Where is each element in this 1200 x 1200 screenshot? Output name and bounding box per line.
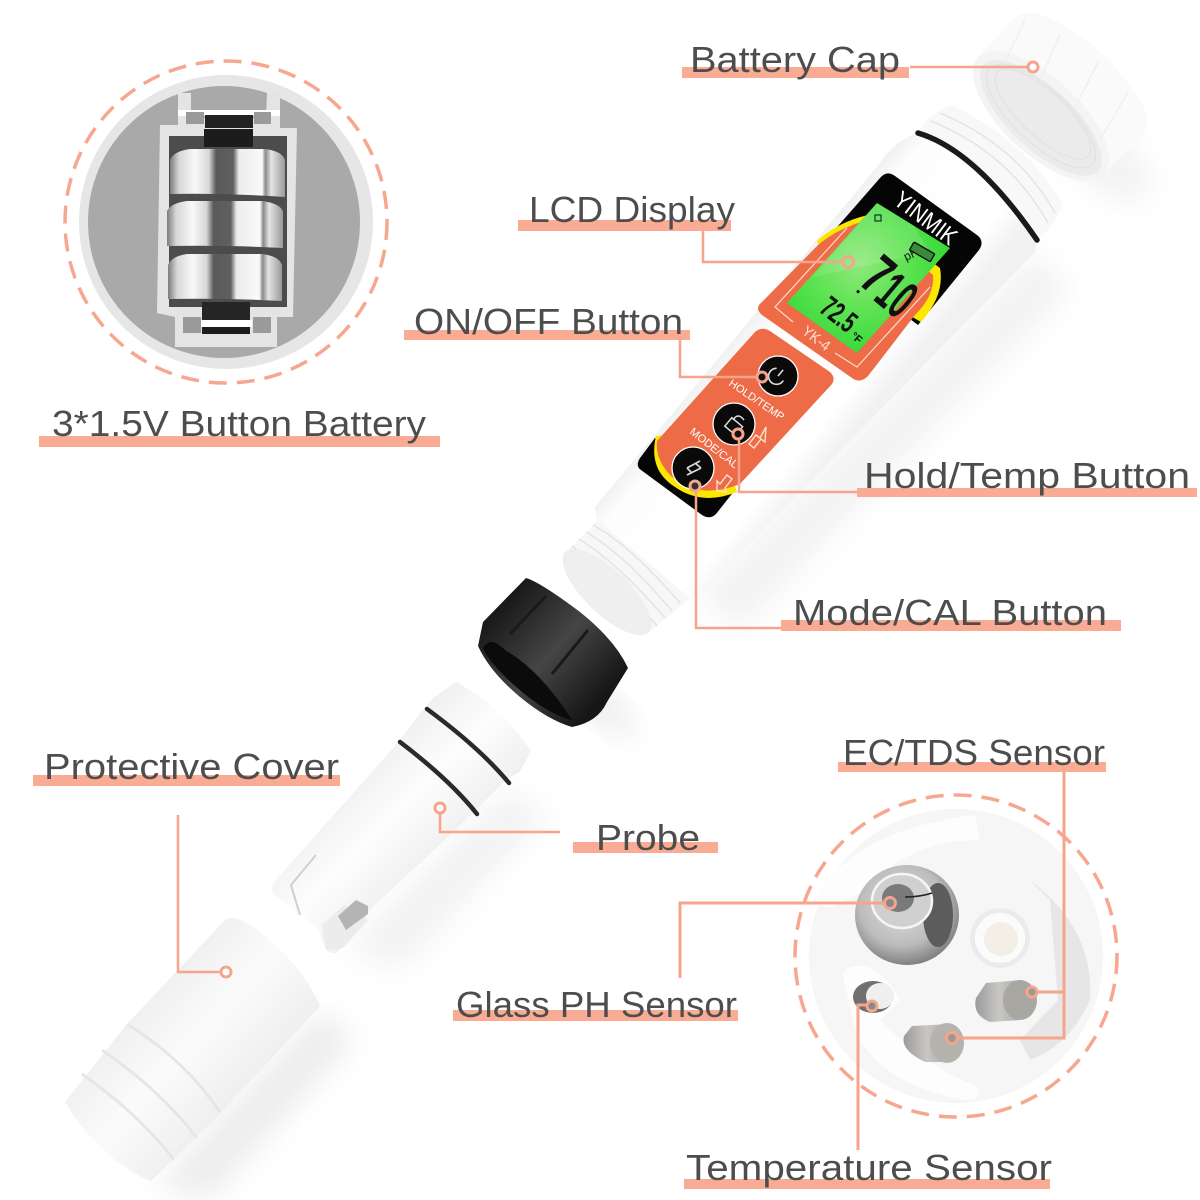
black bezel bbox=[817, 173, 982, 325]
green LCD screen bbox=[787, 203, 950, 353]
label: EC/TDS Sensor: EC/TDS Sensor bbox=[843, 732, 1105, 773]
labels: MODE/CAL: MODE/CAL bbox=[687, 426, 740, 471]
label: 3*1.5V Button Battery: 3*1.5V Button Battery bbox=[52, 403, 426, 444]
black base bbox=[638, 438, 735, 517]
label: Probe: Probe bbox=[596, 817, 700, 858]
three button batteries bbox=[167, 149, 285, 301]
leader: Probe bbox=[435, 803, 560, 832]
EC/TDS pin 2 bbox=[903, 1023, 964, 1063]
body shell bbox=[595, 133, 1037, 597]
meter main body bbox=[550, 105, 1070, 648]
reading: pH value: . bbox=[852, 278, 870, 298]
label: Mode/CAL Button: Mode/CAL Button bbox=[793, 592, 1107, 633]
leader: LCD Display bbox=[703, 231, 854, 268]
leader: Mode/CAL Button bbox=[690, 481, 781, 628]
yellow arc bbox=[817, 215, 941, 322]
label: Hold/Temp Button: Hold/Temp Button bbox=[864, 455, 1190, 496]
O-ring 2 bbox=[400, 742, 477, 814]
O-ring 1 bbox=[427, 709, 509, 783]
status icon bbox=[875, 215, 881, 221]
button: power bbox=[758, 356, 798, 396]
sensor face bbox=[809, 809, 1103, 1103]
leader: Battery Cap bbox=[910, 62, 1038, 72]
leader: Hold/Temp Button bbox=[733, 429, 857, 492]
arrow down bbox=[717, 475, 732, 492]
reading: pH value: 10 bbox=[864, 261, 929, 329]
LCD display panel bbox=[758, 173, 982, 381]
protective cover bbox=[65, 918, 355, 1200]
label: Temperature Sensor: Temperature Sensor bbox=[686, 1147, 1052, 1188]
label: Glass PH Sensor: Glass PH Sensor bbox=[456, 984, 737, 1025]
brand: YINMIK: YINMIK bbox=[888, 186, 962, 251]
cover ridges bbox=[82, 1024, 220, 1160]
unit: degrees F: °F bbox=[848, 330, 865, 347]
dashed circle: battery inset bbox=[65, 61, 387, 383]
reading: temperature: 72.5 bbox=[814, 291, 863, 339]
leader: Glass PH Sensor bbox=[680, 898, 896, 978]
leader: Temperature Sensor bbox=[858, 1001, 877, 1150]
black retaining ring bbox=[478, 578, 645, 748]
unit: pH: pH bbox=[901, 245, 921, 264]
glass pH sensor bbox=[855, 865, 959, 965]
temperature sensor bbox=[853, 981, 894, 1013]
EC/TDS pin 1 bbox=[975, 980, 1037, 1022]
button panel bbox=[638, 329, 834, 517]
reference pad bbox=[970, 908, 1030, 968]
inset: sensors bbox=[795, 795, 1117, 1117]
white ridge top bbox=[813, 815, 980, 908]
leader: EC/TDS Sensor bbox=[946, 772, 1064, 1044]
battery holder bbox=[157, 93, 297, 347]
battery housing bbox=[79, 75, 373, 369]
reading: pH value: 7 bbox=[849, 243, 907, 307]
shaded area bbox=[1020, 880, 1090, 1060]
leader: Protective Cover bbox=[178, 815, 231, 977]
button: lock bbox=[713, 403, 755, 445]
white ridge bottom bbox=[843, 966, 978, 1100]
probe contact bbox=[338, 900, 368, 930]
battery cap bbox=[952, 13, 1167, 220]
leader: ON/OFF Button bbox=[680, 340, 767, 382]
label: ON/OFF Button: ON/OFF Button bbox=[414, 301, 683, 342]
label: LCD Display: LCD Display bbox=[529, 189, 735, 230]
threaded top collar bbox=[918, 105, 1062, 240]
inset: button battery compartment bbox=[65, 61, 387, 383]
battery indicator bbox=[910, 242, 935, 262]
button: mode bbox=[672, 447, 714, 489]
threaded bottom collar bbox=[565, 520, 690, 632]
label: Probe bbox=[573, 817, 718, 858]
yellow arc bbox=[654, 435, 737, 498]
dashed circle: sensor inset bbox=[795, 795, 1117, 1117]
battery contacts bbox=[178, 110, 280, 334]
label: Protective Cover: Protective Cover bbox=[44, 746, 339, 787]
orange panel bbox=[657, 329, 834, 491]
model: YK-4: YK-4 bbox=[799, 323, 834, 355]
arrow up bbox=[749, 427, 766, 448]
panel outline bbox=[775, 228, 930, 367]
probe bbox=[272, 682, 550, 970]
label: Battery Cap: Battery Cap bbox=[690, 39, 900, 80]
reading: pH value bbox=[849, 243, 929, 329]
labels: HOLD/TEMP: HOLD/TEMP bbox=[726, 378, 786, 423]
O-ring bbox=[918, 133, 1037, 240]
orange panel bbox=[758, 220, 933, 381]
